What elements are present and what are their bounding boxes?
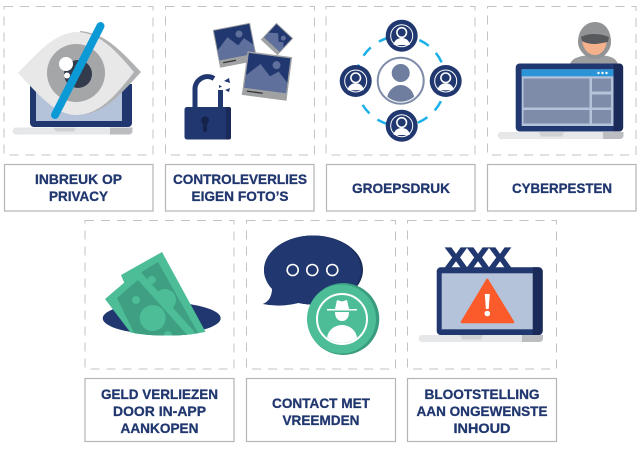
panel: geld verliezen bbox=[85, 220, 234, 369]
label: geld verliezen: AANKOPEN bbox=[120, 420, 198, 436]
panel: blootstelling bbox=[408, 220, 556, 369]
icon: hooded figure bbox=[570, 22, 618, 64]
icon: photos bbox=[213, 23, 293, 101]
label: geld verliezen bbox=[85, 378, 234, 442]
icon: speech bubble bbox=[263, 236, 363, 306]
label: blootstelling: BLOOTSTELLING bbox=[424, 386, 540, 402]
label: blootstelling: INHOUD bbox=[454, 420, 510, 436]
icon: group network bbox=[340, 20, 462, 142]
label: geld verliezen: GELD VERLIEZEN bbox=[101, 386, 218, 402]
panel: controleverlies bbox=[166, 6, 314, 155]
label: contact met vreemden: VREEMDEN bbox=[282, 412, 360, 428]
label: groepsdruk bbox=[326, 164, 475, 211]
panel: groepsdruk bbox=[326, 6, 475, 155]
icon: stranger badge bbox=[307, 283, 379, 355]
icon: laptop with web page bbox=[498, 64, 624, 139]
panel: contact met vreemden bbox=[246, 220, 396, 369]
label: contact met vreemden: CONTACT MET bbox=[272, 395, 370, 411]
panel: cyberpesten bbox=[488, 6, 636, 155]
label: inbreuk op privacy bbox=[4, 164, 153, 211]
label: inbreuk op privacy: INBREUK OP bbox=[35, 171, 122, 187]
label: cyberpesten bbox=[488, 164, 636, 211]
icon: laptop with warning bbox=[419, 267, 543, 342]
panel: inbreuk op privacy bbox=[4, 6, 153, 155]
heading: XXX: XXX bbox=[445, 243, 512, 275]
label: blootstelling: AAN ONGEWENSTE bbox=[416, 403, 548, 419]
icon: laptop with eye bbox=[13, 26, 141, 135]
label: blootstelling bbox=[408, 378, 556, 442]
label: groepsdruk: GROEPSDRUK bbox=[352, 180, 450, 196]
label: controleverlies: CONTROLEVERLIES bbox=[173, 171, 307, 187]
icon: open padlock bbox=[184, 77, 231, 140]
icon: money falling in hole bbox=[103, 252, 221, 345]
label: geld verliezen: DOOR IN-APP bbox=[113, 403, 206, 419]
label: contact met vreemden bbox=[246, 378, 396, 442]
label: controleverlies bbox=[166, 164, 314, 211]
label: inbreuk op privacy: PRIVACY bbox=[49, 188, 109, 204]
label: cyberpesten: CYBERPESTEN bbox=[512, 180, 612, 196]
label: controleverlies: EIGEN FOTO’S bbox=[192, 188, 288, 204]
